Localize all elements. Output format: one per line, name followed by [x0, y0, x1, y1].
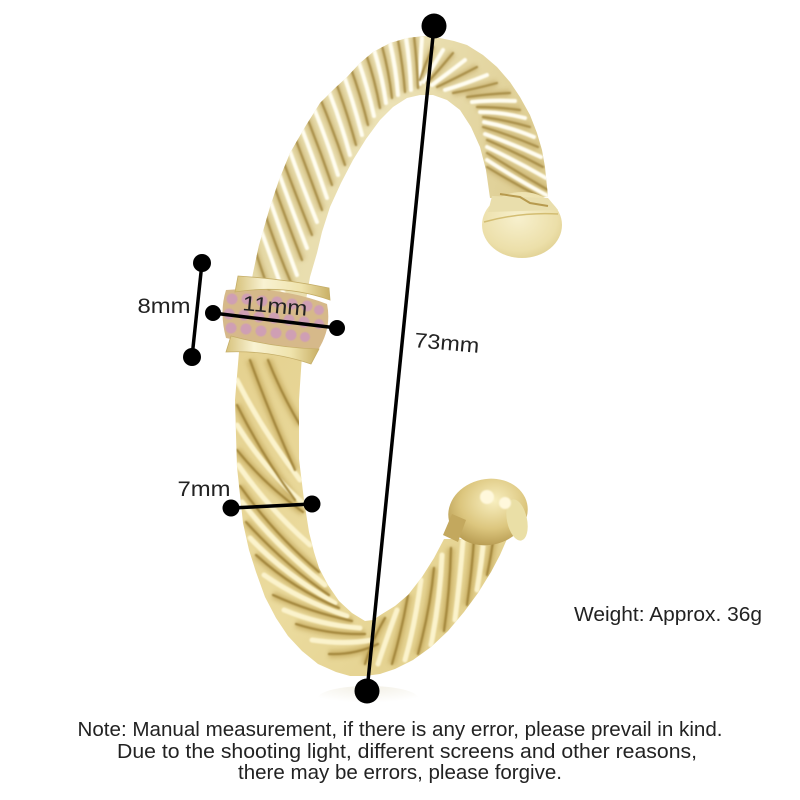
pink gem spacer bead — [222, 276, 330, 364]
label: 8mm: 8mm — [138, 295, 190, 318]
upper arc of cuff — [252, 36, 548, 298]
disclaimer note: Due to the shooting light, different screens and other reasons, — [117, 741, 697, 763]
disclaimer note — [78, 719, 722, 784]
lower arc of cuff — [235, 352, 506, 676]
top metal collar — [235, 276, 330, 300]
label: 7mm: 7mm — [178, 478, 230, 501]
floor reflection — [318, 686, 418, 710]
gem band — [222, 289, 328, 350]
measurement: overall height 73mm — [354, 14, 446, 704]
end cap: upper ball — [482, 192, 562, 258]
label: 11mm: 11mm — [242, 292, 308, 321]
bangle: twisted gold cuff — [225, 30, 562, 685]
weight note: Weight: Approx. 36g — [574, 604, 762, 626]
measurement: bead width 11mm — [205, 305, 345, 336]
bottom metal collar — [226, 336, 319, 364]
label: 73mm: 73mm — [413, 329, 480, 358]
disclaimer note: there may be errors, please forgive. — [238, 762, 562, 784]
disclaimer note: Note: Manual measurement, if there is any error, please prevail in kind. — [78, 719, 722, 741]
measurement: band width 7mm — [222, 496, 320, 516]
pink gems — [224, 294, 324, 342]
end cap: lower ball — [442, 471, 534, 553]
measurement: bead height 8mm — [183, 254, 211, 366]
